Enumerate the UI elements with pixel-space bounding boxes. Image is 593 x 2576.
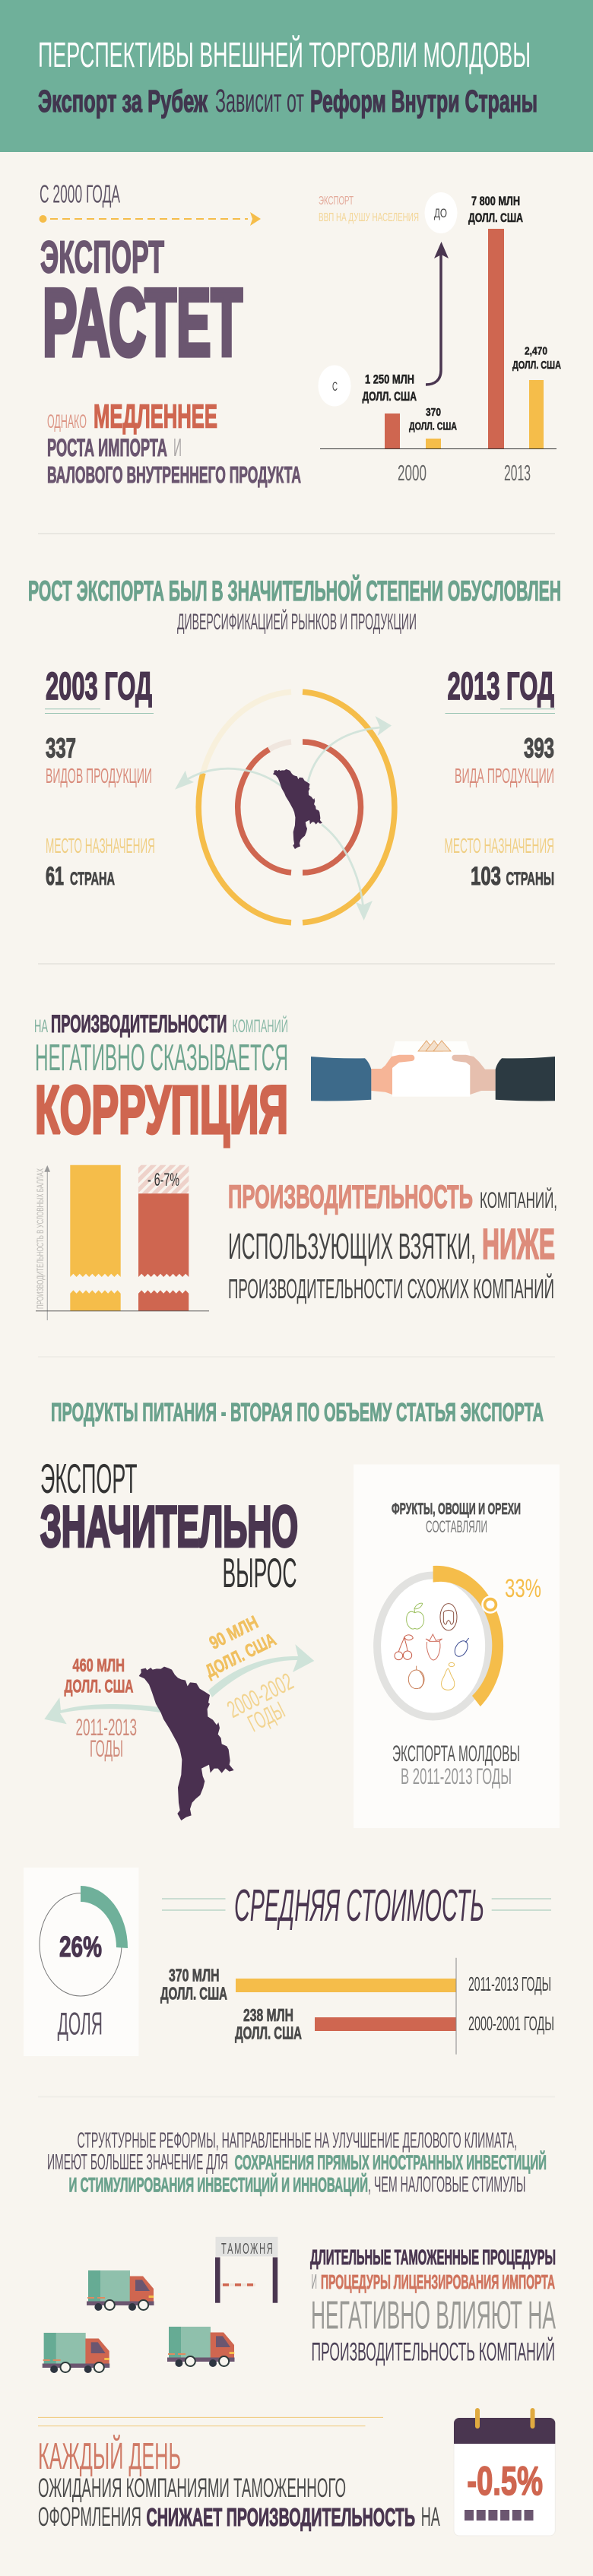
value labels: ДОЛЛ. США	[512, 359, 561, 372]
reforms statement: ИМЕЮТ БОЛЬШЕЕ ЗНАЧЕНИЕ ДЛЯ	[47, 2150, 228, 2175]
icon: customs gate: ТАМОЖНЯ	[221, 2240, 274, 2258]
map: Moldova large	[139, 1667, 234, 1820]
productivity statement	[228, 1179, 557, 1304]
bar chart: average value: ДОЛЛ. США	[235, 2023, 302, 2043]
label: 460 million: ДОЛЛ. США	[64, 1677, 134, 1697]
customs statement: И	[312, 2270, 317, 2293]
slower note: ОДНАКО	[47, 411, 87, 433]
card: 26 percent share: ДОЛЯ	[58, 2006, 103, 2042]
corruption headline: ПРОИЗВОДИТЕЛЬНОСТИ	[51, 1010, 227, 1038]
bar chart: average value: 238 МЛН	[243, 2005, 293, 2025]
column: 2003: СТРАНА	[70, 869, 115, 889]
icon: calendar with minus 0.5 percent: -0.5%	[467, 2459, 543, 2504]
headline: export grew significantly: ЭКСПОРТ	[40, 1456, 137, 1502]
label: 460 million: 2011-2013	[76, 1713, 137, 1741]
every day statement: ОФОРМЛЕНИЯ	[38, 2502, 141, 2532]
legend: ЭКСПОРТ	[319, 195, 354, 208]
label: 460 million	[64, 1656, 137, 1762]
growth arrow	[426, 242, 449, 385]
panel: corruption: НЕГАТИВНО СКАЗЫВАЕТСЯ	[35, 1037, 288, 1079]
label: 460 million: 460 МЛН	[73, 1656, 125, 1676]
icon: truck 2	[43, 2333, 109, 2373]
donut chart 33 percent	[377, 1566, 503, 1716]
label: 90 million: ГОДЫ	[243, 1696, 289, 1737]
bar chart: export and GDP per capita: 2013	[504, 461, 531, 486]
arrow: 2000-2002	[208, 1644, 314, 1697]
header banner	[0, 0, 593, 152]
icon: truck 3	[167, 2327, 234, 2367]
label: 90 million: 90 МЛН	[206, 1612, 262, 1654]
headline: export grew significantly: ЗНАЧИТЕЛЬНО	[40, 1495, 298, 1560]
to badge: ДО	[434, 206, 447, 220]
ring diagram with map	[175, 692, 395, 923]
corruption headline: КОРРУПЦИЯ	[35, 1072, 288, 1148]
heading: grows: РАСТЕТ	[43, 271, 243, 375]
legend: ВВП НА ДУШУ НАСЕЛЕНИЯ	[319, 211, 419, 224]
reforms statement	[47, 2129, 547, 2197]
bar chart: average value	[160, 1958, 554, 2055]
column: 2003: ВИДОВ ПРОДУКЦИИ	[46, 764, 152, 787]
label: 90 million: ДОЛЛ. США	[202, 1630, 279, 1682]
column: 2003: 2003 ГОД	[46, 664, 152, 708]
bar chart: export and GDP per capita: 2000	[398, 461, 427, 486]
icons: fruits and nuts	[395, 1603, 471, 1690]
heading: export: ЭКСПОРТ	[40, 233, 164, 283]
value labels: 1 250 МЛН	[365, 372, 414, 386]
since 2000 label: С 2000 ГОДА	[40, 181, 120, 208]
every day statement: СНИЖАЕТ ПРОИЗВОДИТЕЛЬНОСТЬ	[146, 2503, 415, 2531]
column: 2003: 337	[46, 733, 76, 764]
arrow: 2011-2013	[44, 1697, 160, 1724]
value labels: ДОЛЛ. США	[362, 389, 417, 404]
icon: calendar with minus 0.5 percent	[454, 2410, 555, 2536]
panel: diversification: МЕСТО НАЗНАЧЕНИЯ	[46, 834, 155, 857]
card: fruit share: СОСТАВЛЯЛИ	[426, 1517, 487, 1536]
every day statement: НА	[421, 2502, 440, 2532]
value labels: ДОЛЛ. США	[409, 420, 457, 433]
label: 90 million: 2000-2002	[223, 1667, 297, 1723]
subtitle: Зависит от	[215, 83, 304, 119]
panel: structural reforms	[38, 2129, 556, 2536]
value labels: 2,470	[525, 345, 547, 357]
panel: corruption	[34, 1010, 557, 1320]
headline: export grew significantly	[40, 1456, 298, 1596]
from badge	[318, 365, 351, 406]
card: 26 percent share: 26%	[59, 1931, 102, 1963]
slower note	[47, 398, 301, 488]
bar chart: productivity	[36, 1165, 209, 1320]
reforms statement: И СТИМУЛИРОВАНИЯ ИНВЕСТИЦИЙ И ИННОВАЦИЙ	[68, 2173, 368, 2197]
panel: food exports: ВЫРОС	[222, 1550, 296, 1596]
33 percent value: 33%	[505, 1574, 541, 1603]
corruption headline: КОМПАНИЙ	[233, 1016, 288, 1037]
column: 2013	[444, 664, 555, 891]
customs statement	[310, 2245, 556, 2367]
subtitle	[38, 83, 538, 119]
value labels: 7 800 МЛН	[471, 194, 520, 208]
map: Moldova	[273, 769, 322, 849]
every day statement: КАЖДЫЙ ДЕНЬ	[38, 2434, 181, 2477]
icon: truck 1	[87, 2270, 154, 2311]
timeline arrow	[40, 212, 261, 226]
column: 2013: 393	[524, 733, 554, 764]
panel: diversification	[28, 575, 561, 923]
every day statement	[38, 2434, 440, 2532]
subtitle: Экспорт за Рубеж	[38, 84, 208, 119]
value labels	[362, 194, 561, 433]
minus 6-7 percent label: - 6-7%	[147, 1170, 179, 1190]
panel: food exports	[40, 1398, 560, 1828]
panel: share and average value	[24, 1868, 554, 2056]
card: 26 percent share	[24, 1868, 138, 2056]
icon: customs gate	[215, 2237, 278, 2303]
arrows out of map	[175, 716, 392, 920]
slower note: МЕДЛЕННЕЕ	[94, 398, 217, 435]
column: 2003	[45, 664, 155, 891]
value labels: 370	[426, 406, 441, 419]
bar chart: export and GDP per capita	[318, 192, 561, 486]
column: 2003: 61	[46, 862, 64, 891]
corruption headline	[34, 1010, 288, 1148]
label: 90 million	[202, 1612, 297, 1737]
label: 460 million: ГОДЫ	[90, 1735, 123, 1762]
column: 2013: СТРАНЫ	[506, 869, 554, 889]
from badge: С	[332, 379, 338, 394]
slower note: ВАЛОВОГО ВНУТРЕННЕГО ПРОДУКТА	[47, 461, 301, 488]
bar chart: average value: ДОЛЛ. США	[160, 1984, 227, 2004]
bar chart: average value: 370 МЛН	[169, 1966, 219, 1985]
legend	[319, 195, 419, 224]
icon: hands passing envelope	[311, 1041, 555, 1101]
y axis label: ПРОИЗВОДИТЕЛЬНОСТЬ В УСЛОВНЫХ БАЛЛАХ	[36, 1168, 46, 1309]
slower note: РОСТА ИМПОРТА	[47, 434, 167, 461]
corruption headline: НА	[34, 1016, 48, 1037]
column: 2013: 103	[471, 862, 501, 891]
slower note: И	[173, 433, 182, 461]
to badge	[424, 192, 458, 233]
card: fruit share: В 2011-2013 ГОДЫ	[401, 1764, 512, 1789]
value labels: ДОЛЛ. США	[468, 211, 523, 225]
card: fruit share	[354, 1464, 560, 1828]
